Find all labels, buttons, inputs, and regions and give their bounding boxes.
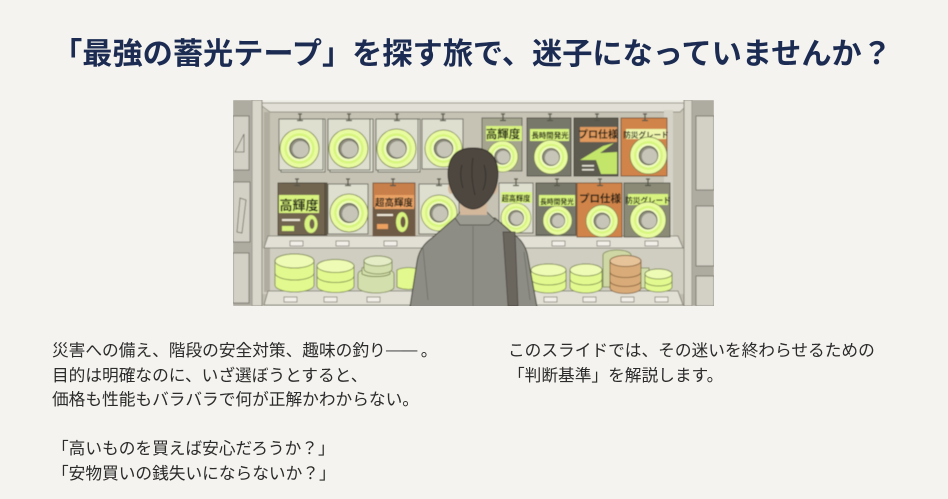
man seen from behind xyxy=(410,148,537,307)
second row tape packages left: 高輝度 xyxy=(279,198,319,213)
top row tape packages right: 高輝度 xyxy=(486,127,521,141)
title: 「最強の蓄光テープ」を探す旅で、迷子になっていませんか？ xyxy=(52,38,892,71)
second row tape packages right: プロ仕様 xyxy=(579,192,621,205)
right text: slide purpose: このスライドでは、その迷いを終わらせるための 「判断基準」を解説します。 xyxy=(508,341,875,385)
second row tape packages right xyxy=(499,179,671,238)
second row tape packages left: 超高輝度 xyxy=(375,197,413,209)
second row tape packages left xyxy=(278,179,459,236)
store background xyxy=(233,100,714,306)
bag strap xyxy=(503,232,518,306)
side shelf boxes right xyxy=(696,116,714,306)
second row tape packages right: 超高輝度 xyxy=(502,194,530,203)
second row tape packages right: 防災グレード xyxy=(625,195,671,205)
top row tape packages right: 防災グレード xyxy=(623,130,669,140)
side shelf boxes left xyxy=(233,116,250,303)
bottom shelf tape stacks xyxy=(275,250,672,294)
left text: problem description: 災害への備え、階段の安全対策、趣味の釣り 。 目的は明確なのに、いざ選ぼうとすると、 価格も性能もバラバラで何が正解かわからない。 「高いものを買えば安心だろうか？」 「安物買いの銭失いにならないか？」 xyxy=(52,341,437,483)
shelves xyxy=(264,236,683,305)
illustration: man choosing luminous tape at a store shelf xyxy=(233,100,714,306)
second row tape packages right: 長時間発光 xyxy=(540,197,574,206)
left text: problem description: ── xyxy=(386,341,417,360)
top row tape packages left xyxy=(279,114,463,172)
top row tape packages right: プロ仕様 xyxy=(578,128,618,141)
top row tape packages right: 長時間発光 xyxy=(532,131,569,140)
top row tape packages right xyxy=(482,114,669,176)
